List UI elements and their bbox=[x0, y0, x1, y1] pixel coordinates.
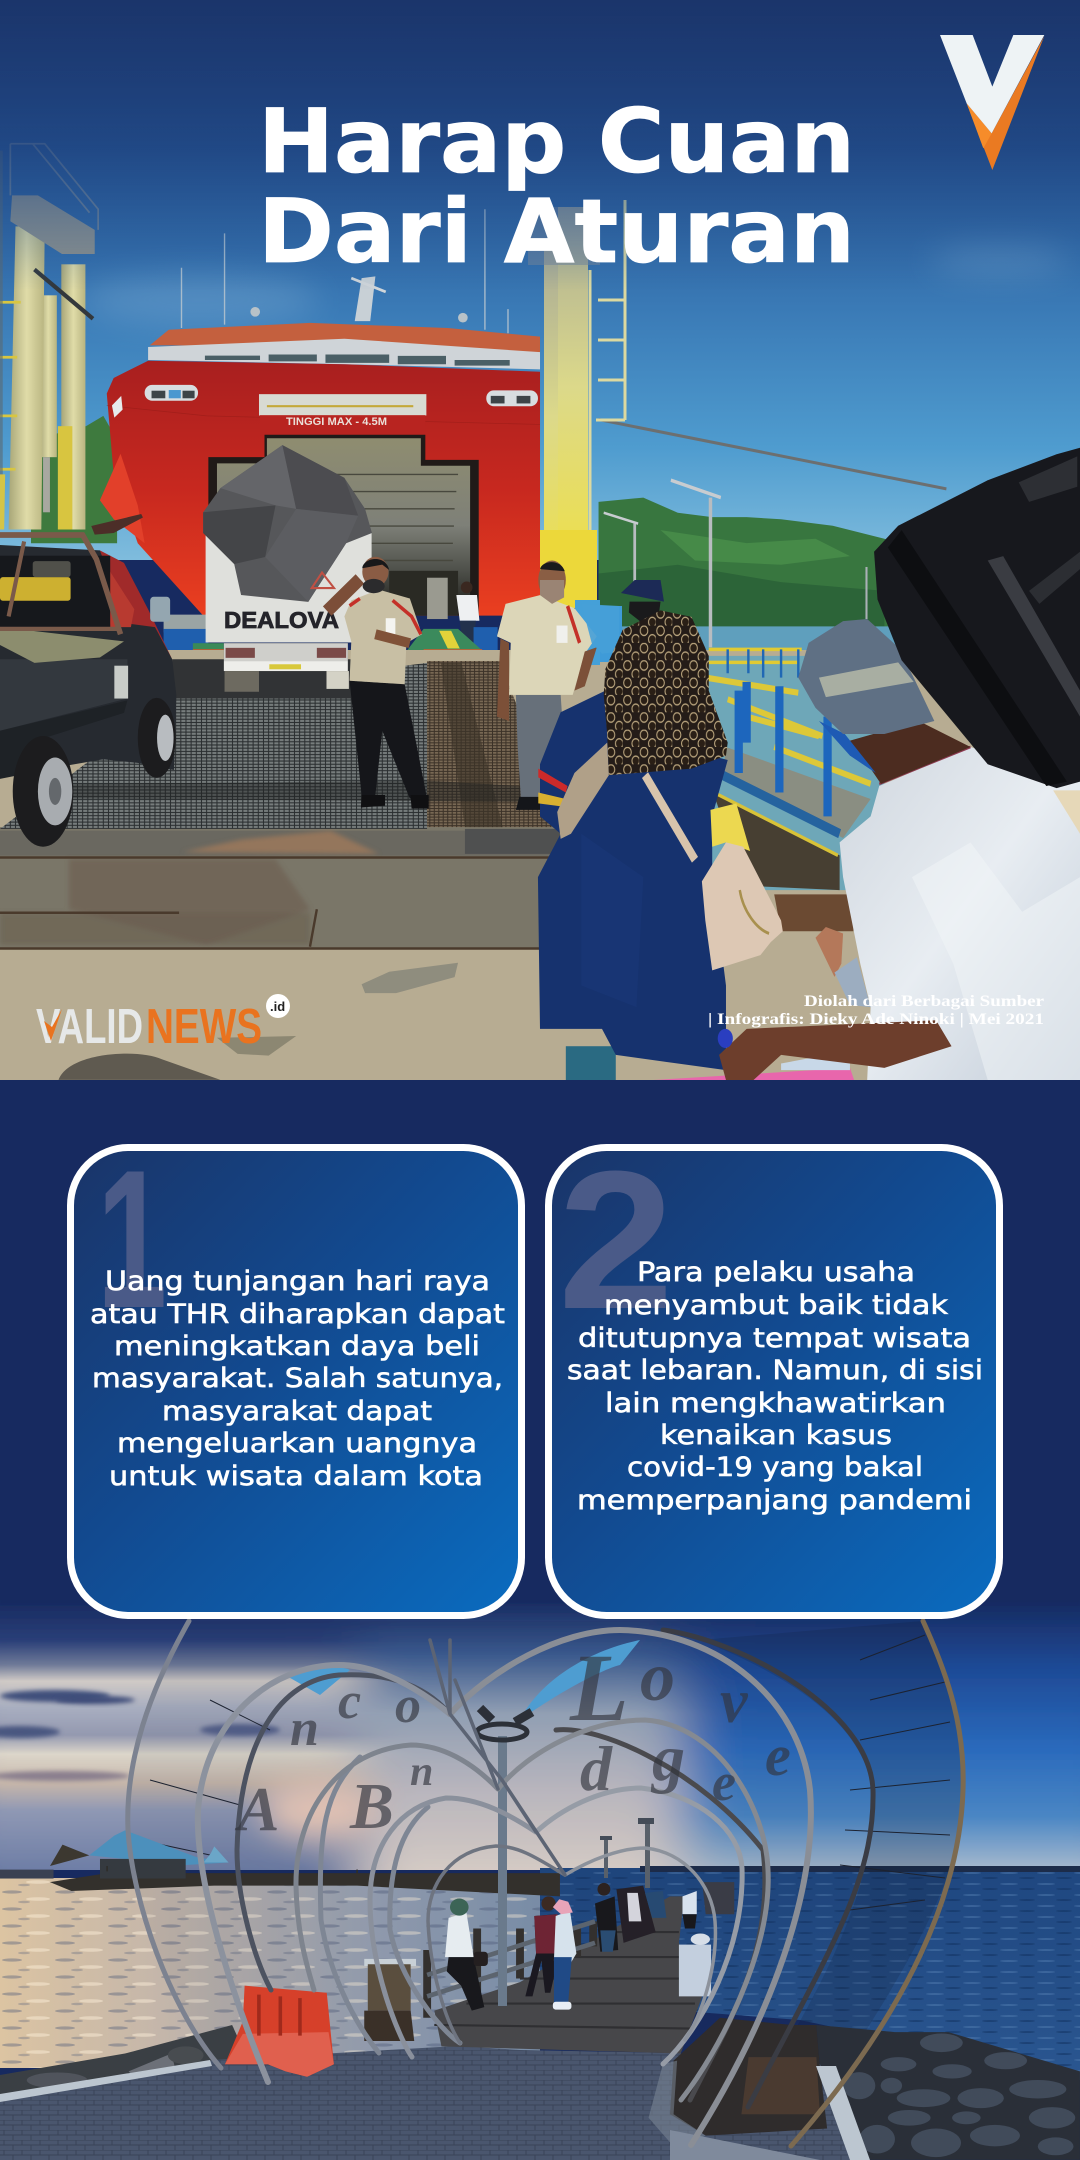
person in ship bbox=[456, 595, 479, 621]
brown base inside arches bbox=[649, 2018, 827, 2146]
left yellow pillars bbox=[0, 144, 98, 530]
mesh script letters: c bbox=[338, 1673, 361, 1730]
railing left bbox=[427, 1921, 593, 2018]
heart A bbox=[198, 1665, 450, 2082]
text block 1: atau THR diharapkan dapat bbox=[90, 1299, 505, 1330]
jeans bbox=[566, 1046, 616, 1081]
hijab bbox=[604, 610, 728, 775]
handbag bbox=[702, 842, 783, 970]
text block 1 bbox=[90, 1266, 505, 1492]
wooden boardwalk bbox=[427, 1896, 711, 2054]
logo: validnews: VALID bbox=[36, 1000, 143, 1054]
blue sky through arches bbox=[285, 1640, 640, 1720]
man saluting bbox=[327, 557, 429, 809]
title: Harap Cuan bbox=[258, 90, 855, 193]
mesh script letters: v bbox=[720, 1668, 749, 1736]
ground concrete bbox=[0, 650, 1080, 1080]
hull base and deck ramp bbox=[164, 614, 498, 650]
people on pier bbox=[445, 1882, 734, 2011]
text block 1: masyarakat. Salah satunya, bbox=[92, 1363, 503, 1394]
neck bbox=[843, 721, 970, 784]
cap bbox=[798, 619, 934, 734]
utility box bbox=[364, 1959, 416, 2041]
heart arches bbox=[128, 1621, 963, 2146]
panel: card 2 bbox=[548, 1130, 1000, 1616]
patch bbox=[362, 963, 458, 993]
curbs bbox=[0, 2060, 870, 2160]
woman in blue dress bbox=[538, 610, 783, 1081]
text block 2: kenaikan kasus bbox=[660, 1420, 892, 1451]
basin bbox=[654, 1068, 854, 1080]
tarp bbox=[203, 445, 372, 602]
sea bbox=[622, 626, 896, 650]
mesh script letters: B bbox=[349, 1770, 394, 1843]
text block 2: Para pelaku usaha bbox=[637, 1257, 915, 1288]
strap bbox=[645, 775, 695, 860]
text block 1: Uang tunjangan hari raya bbox=[105, 1266, 490, 1297]
card 1 frame bbox=[70, 1148, 522, 1616]
text block 2: covid-19 yang bakal bbox=[627, 1452, 923, 1483]
logo: validnews bbox=[36, 994, 290, 1054]
grating bbox=[0, 663, 427, 829]
man carrying suitcase bbox=[654, 448, 1080, 1080]
kid hand bbox=[816, 927, 843, 977]
right yellow pillar and ladder bbox=[528, 200, 625, 665]
evening sky bbox=[0, 1600, 1080, 1870]
man with shirt and mask bbox=[497, 560, 597, 810]
barbed wire strands on mesh bbox=[140, 1635, 950, 1910]
mesh script letters: n bbox=[290, 1700, 319, 1757]
text block 1: masyarakat dapat bbox=[162, 1396, 432, 1427]
ship opening bbox=[208, 435, 479, 653]
red body bbox=[107, 361, 540, 616]
text block 2: lain mengkhawatirkan bbox=[605, 1388, 946, 1419]
text block 2: ditutupnya tempat wisata bbox=[578, 1323, 971, 1354]
truck DEALOVA: DEALOVA bbox=[224, 607, 339, 633]
text block 2 bbox=[567, 1257, 983, 1516]
source credit bbox=[708, 993, 1044, 1028]
text block 1: mengeluarkan uangnya bbox=[117, 1428, 477, 1459]
mesh script letters: d bbox=[580, 1733, 613, 1804]
shirt bbox=[840, 747, 1080, 1080]
number 1: 1 bbox=[97, 1129, 167, 1349]
source credit: | Infografis: Dieky Ade Ninoki | Mei 2021 bbox=[708, 1011, 1044, 1028]
heart mesh bbox=[128, 1621, 963, 2146]
mesh script letters: L bbox=[569, 1634, 629, 1741]
title: Dari Aturan bbox=[258, 180, 855, 283]
red barrier bbox=[225, 1986, 334, 2077]
mesh script letters: n bbox=[410, 1749, 433, 1795]
cable and lamp posts bbox=[599, 420, 946, 647]
heart C bbox=[370, 1798, 536, 2057]
logo: validnews: .id bbox=[270, 999, 285, 1014]
mesh script letters: e bbox=[712, 1752, 736, 1812]
clouds bbox=[80, 244, 1070, 326]
pavement bbox=[0, 2046, 865, 2160]
panel: pier photo bbox=[0, 1600, 1080, 2160]
panel: ferry port photo bbox=[0, 0, 1080, 1081]
pickup truck bbox=[0, 535, 176, 847]
right rocks bbox=[816, 2025, 1080, 2160]
source credit: Diolah dari Berbagai Sumber bbox=[804, 993, 1044, 1010]
ship hull bbox=[91, 209, 540, 616]
white block bbox=[679, 1945, 711, 1996]
title bbox=[258, 90, 855, 283]
mesh script letters bbox=[234, 1634, 791, 1844]
logo: validnews: NEWS bbox=[146, 1000, 262, 1054]
portholes bbox=[145, 385, 198, 401]
icon: V logo bbox=[940, 35, 1044, 170]
number 2: 2 bbox=[558, 1130, 674, 1350]
bulb bbox=[100, 454, 145, 543]
right dock gap bbox=[692, 656, 884, 931]
strap beige bbox=[1053, 790, 1080, 834]
mesh script letters: o bbox=[640, 1639, 675, 1716]
text block 2: memperpanjang pandemi bbox=[577, 1485, 972, 1516]
arm bbox=[719, 1020, 952, 1080]
sea left bbox=[0, 1878, 540, 2068]
yellow bag behind bbox=[710, 803, 750, 851]
suitcase bbox=[874, 448, 1080, 788]
railing bbox=[705, 649, 871, 816]
left green hill bbox=[31, 416, 117, 543]
truck DEALOVA bbox=[203, 445, 372, 692]
mesh script letters: o bbox=[395, 1677, 421, 1734]
green hill right bbox=[598, 498, 896, 650]
left rocks bbox=[0, 2025, 250, 2098]
sky bbox=[0, 107, 1080, 560]
officer with cap bbox=[586, 580, 664, 648]
dress bbox=[538, 691, 728, 1070]
mesh script letters: g bbox=[650, 1722, 685, 1795]
clouds bbox=[0, 1690, 380, 1840]
text block 1: meningkatkan daya beli bbox=[114, 1331, 480, 1362]
mesh script letters: A bbox=[234, 1776, 279, 1844]
mesh script letters: e bbox=[765, 1723, 791, 1788]
far shore bbox=[640, 1866, 1080, 1872]
text block 1: untuk wisata dalam kota bbox=[109, 1461, 483, 1492]
text block 2: saat lebaran. Namun, di sisi bbox=[567, 1355, 983, 1386]
card 2 frame bbox=[548, 1148, 1000, 1616]
panel: card 1 bbox=[70, 1129, 522, 1616]
text block 2: menyambut baik tidak bbox=[604, 1290, 948, 1321]
center pole and lamps bbox=[477, 1708, 654, 2006]
steel plates bbox=[0, 659, 565, 1080]
heart B bbox=[296, 1745, 498, 1990]
center fan bbox=[430, 1640, 565, 1875]
heart D bbox=[428, 1846, 565, 2043]
sign panel bbox=[259, 394, 426, 416]
sign label: TINGGI MAX - 4.5M bbox=[286, 416, 387, 428]
top fade overlay bbox=[0, 0, 1080, 290]
navy background band bbox=[0, 1080, 1080, 1640]
roof and white deck bbox=[150, 323, 540, 352]
pier and pavilion bbox=[0, 1830, 560, 1896]
sea right bbox=[540, 1868, 1080, 2080]
beige cloth bbox=[557, 743, 609, 839]
